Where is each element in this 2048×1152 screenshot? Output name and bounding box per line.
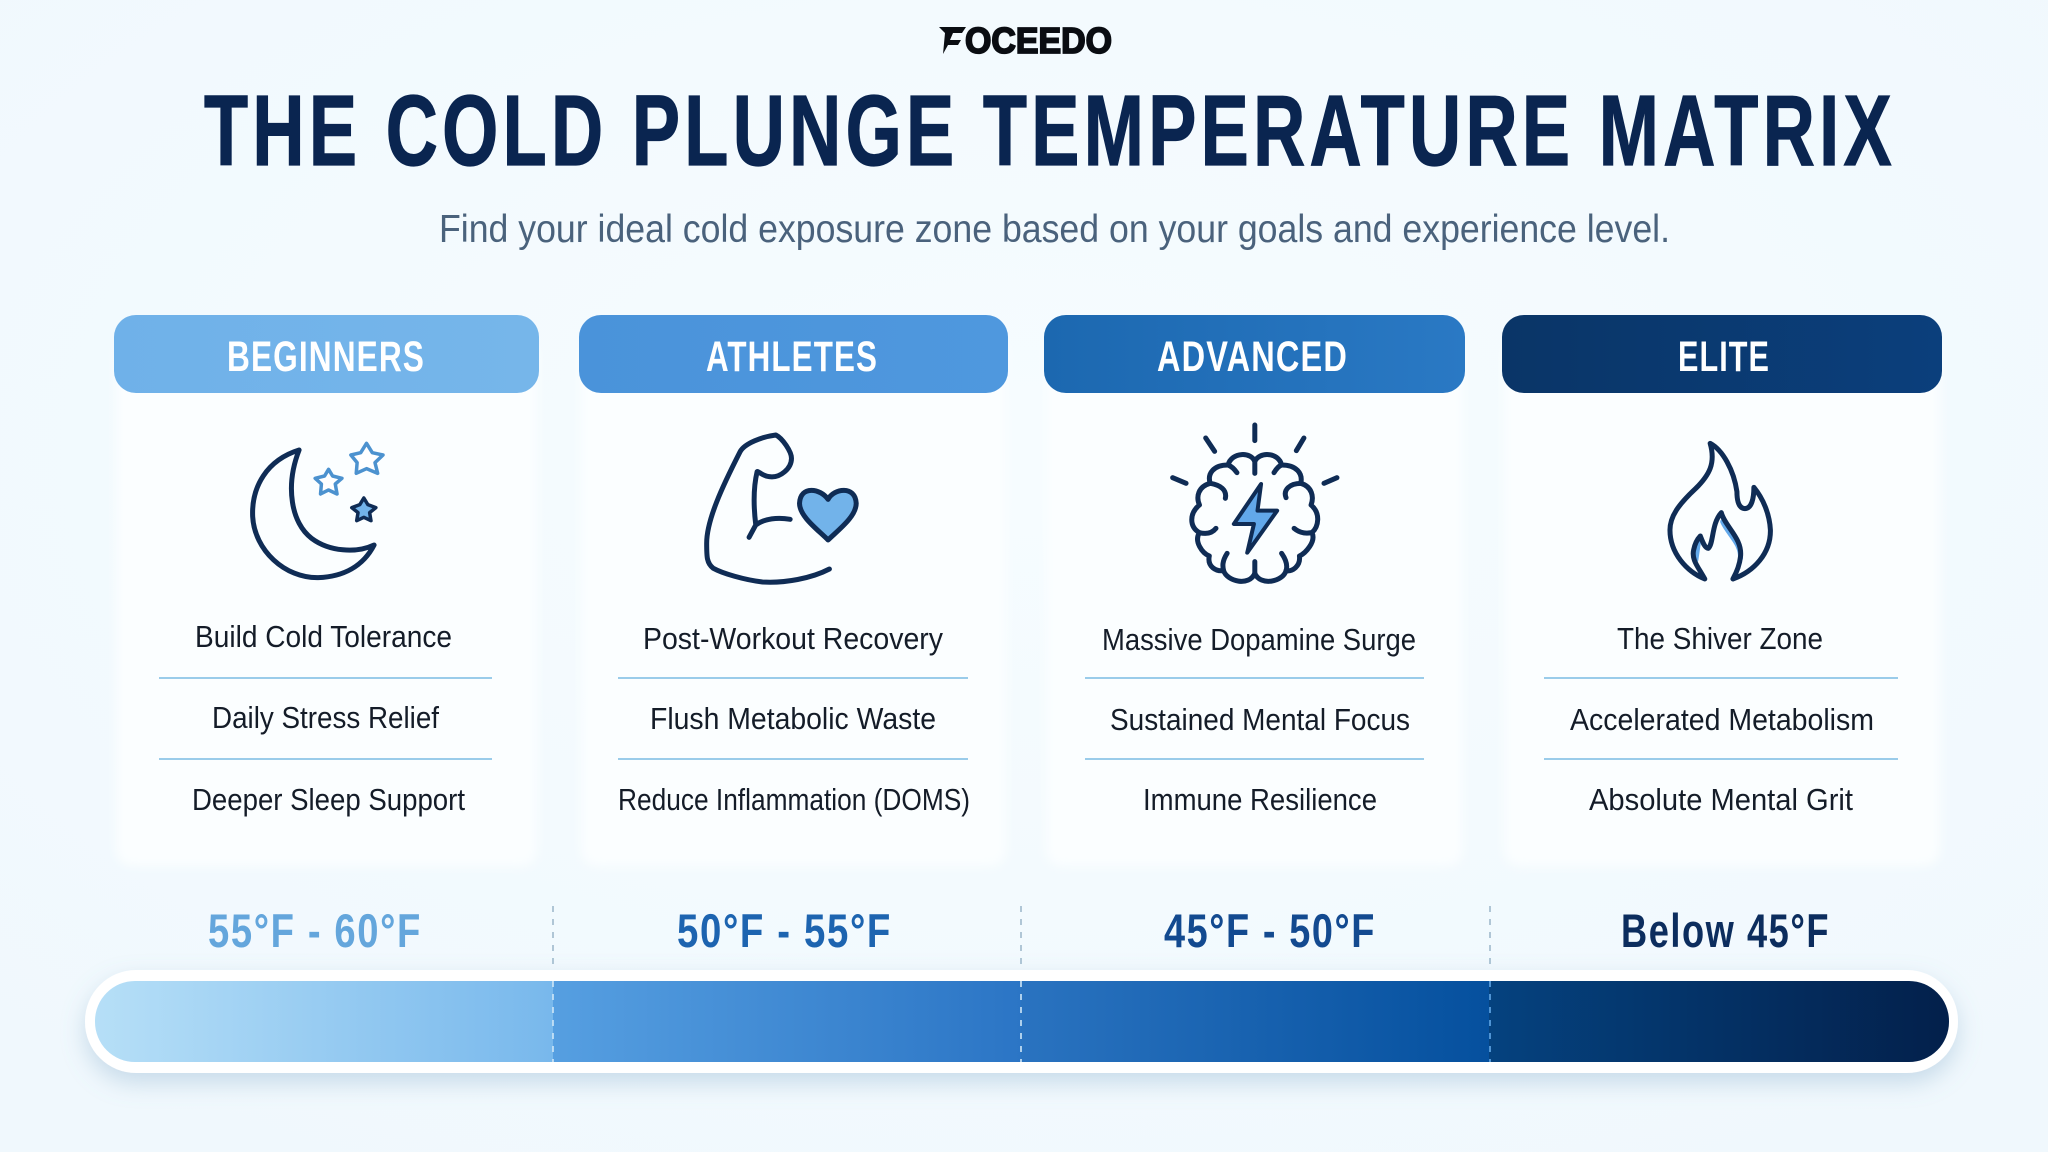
benefits: elite: The Shiver Zone <box>1617 621 1823 656</box>
benefits: beginners: Daily Stress Relief <box>212 700 439 735</box>
header: elite: ELITE <box>1678 333 1770 381</box>
header: advanced: ADVANCED <box>1157 333 1348 381</box>
benefits: advanced: Massive Dopamine Surge <box>1102 622 1416 657</box>
header: beginners <box>114 315 539 393</box>
panel: advanced <box>1044 315 1465 866</box>
temperature labels: 50°F - 55°F <box>677 904 892 957</box>
logo: OCEEDO <box>965 20 1112 61</box>
benefits: elite: Absolute Mental Grit <box>1589 782 1853 817</box>
benefits: beginners: Build Cold Tolerance <box>195 619 452 654</box>
benefits: elite: Accelerated Metabolism <box>1570 702 1874 737</box>
subtitle: Find your ideal cold exposure zone based on your goals and experience level. <box>439 208 1670 251</box>
panel: elite <box>1502 315 1942 866</box>
icon: flame <box>1670 443 1770 579</box>
temperature labels <box>208 904 1830 957</box>
benefits: athletes <box>618 621 970 817</box>
icon: brain with lightning bolt <box>1173 425 1337 581</box>
header: athletes <box>579 315 1008 393</box>
benefits: athletes: Flush Metabolic Waste <box>650 701 936 736</box>
header: athletes: ATHLETES <box>706 333 878 381</box>
benefits: athletes: Reduce Inflammation (DOMS) <box>618 782 970 817</box>
temperature labels: 45°F - 50°F <box>1164 904 1376 957</box>
icon: flexed arm and heart <box>707 435 856 582</box>
temperature labels: Below 45°F <box>1621 904 1830 957</box>
benefits: beginners: Deeper Sleep Support <box>192 782 465 817</box>
benefits: advanced: Sustained Mental Focus <box>1110 702 1410 737</box>
icon: moon and stars <box>253 443 383 578</box>
benefits: advanced <box>1085 622 1424 817</box>
temperature gradient bar <box>85 970 1958 1073</box>
benefits: athletes: Post-Workout Recovery <box>643 621 943 656</box>
temperature labels: 55°F - 60°F <box>208 904 422 957</box>
benefits: advanced: Immune Resilience <box>1143 782 1377 817</box>
benefits: beginners <box>159 619 492 817</box>
panel: beginners <box>114 315 539 866</box>
header: advanced <box>1044 315 1465 393</box>
zone separators <box>553 906 1490 1062</box>
header: beginners: BEGINNERS <box>227 333 425 381</box>
benefits: elite <box>1544 621 1898 817</box>
panel: athletes <box>579 315 1008 866</box>
header: elite <box>1502 315 1942 393</box>
